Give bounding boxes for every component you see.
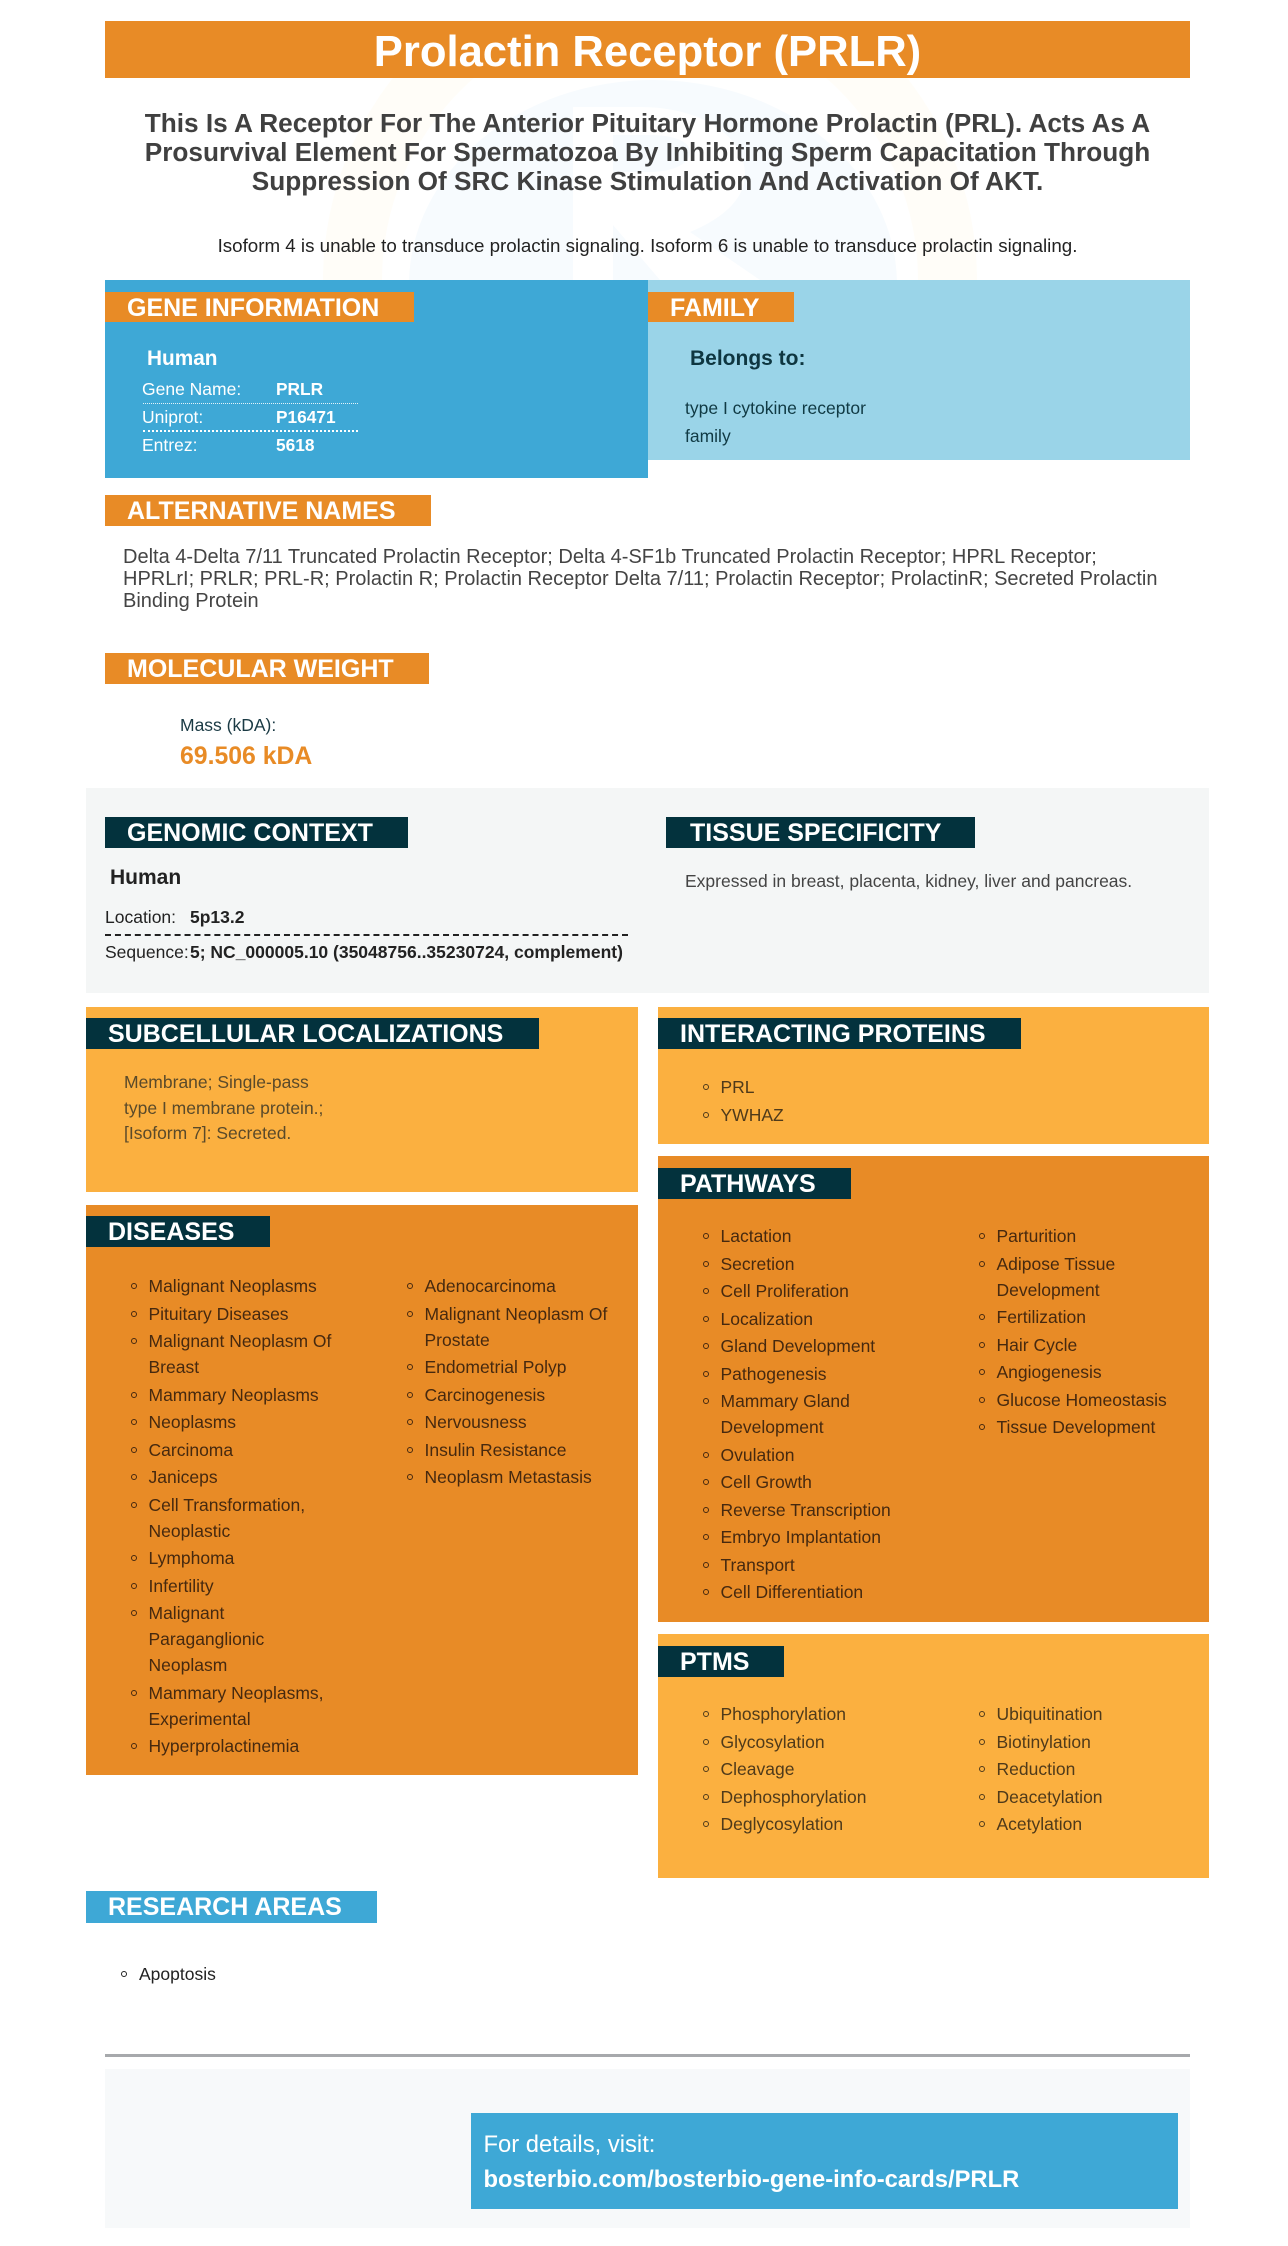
alternative names text: Binding Protein bbox=[123, 590, 259, 612]
belongs to label: Belongs to: bbox=[690, 347, 806, 370]
list: diseases column 2: Adenocarcinoma bbox=[424, 1276, 556, 1296]
list: pathways column 1: Secretion bbox=[720, 1254, 794, 1274]
gene name row bbox=[142, 379, 323, 399]
list: research areas: Apoptosis bbox=[139, 1964, 216, 1984]
heading: alternative names: ALTERNATIVE NAMES bbox=[127, 497, 396, 525]
list: pathways column 1: Lactation bbox=[720, 1226, 792, 1246]
list: pathways column 1: Embryo Implantation bbox=[720, 1527, 881, 1547]
list: pathways column 2: Hair Cycle bbox=[996, 1334, 1077, 1354]
list: diseases column 2: Insulin Resistance bbox=[424, 1440, 567, 1460]
list: pathways column 1: Cell Differentiation bbox=[720, 1582, 863, 1602]
location row bbox=[105, 907, 244, 927]
family text bbox=[685, 398, 866, 446]
heading: genomic context: GENOMIC CONTEXT bbox=[127, 819, 373, 847]
list: pathways column 1 bbox=[703, 1226, 891, 1602]
panel: gene information: PRLR bbox=[276, 379, 323, 399]
list: interacting proteins: YWHAZ bbox=[720, 1104, 784, 1124]
callout label: For details, visit: bbox=[484, 2131, 655, 2158]
list: diseases column 1: Paraganglionic bbox=[148, 1629, 264, 1649]
list: diseases column 1: Infertility bbox=[148, 1576, 214, 1596]
list: diseases column 2: Neoplasm Metastasis bbox=[424, 1467, 592, 1487]
panel: family bbox=[648, 280, 1190, 460]
list: ptms column 1: Dephosphorylation bbox=[720, 1786, 866, 1806]
species label: Human bbox=[110, 866, 181, 889]
list: interacting proteins bbox=[703, 1077, 784, 1124]
list: diseases column 2 bbox=[407, 1276, 608, 1487]
subtitle: This Is A Receptor For The Anterior Pituitary Hormone Prolactin (PRL). Acts As A bbox=[145, 108, 1150, 138]
isoform note: Isoform 4 is unable to transduce prolactin signaling. Isoform 6 is unable to transduce prolactin signaling. bbox=[218, 235, 1077, 256]
title: Prolactin Receptor (PRLR) bbox=[374, 28, 921, 76]
list: pathways column 1: Cell Growth bbox=[720, 1472, 812, 1492]
list: diseases column 1: Neoplastic bbox=[148, 1520, 230, 1540]
localization text bbox=[124, 1072, 323, 1143]
list: diseases column 1: Experimental bbox=[148, 1708, 251, 1728]
heading: pathways bbox=[658, 1168, 851, 1199]
list: pathways column 2: Development bbox=[996, 1280, 1100, 1300]
list: interacting proteins: PRL bbox=[720, 1077, 755, 1097]
list: diseases column 1: Mammary Neoplasms, bbox=[148, 1682, 324, 1702]
list: diseases column 1: Hyperprolactinemia bbox=[148, 1736, 299, 1756]
list: diseases column 2: Prostate bbox=[424, 1330, 490, 1350]
list: ptms column 2: Ubiquitination bbox=[996, 1704, 1103, 1724]
title bbox=[105, 21, 1190, 78]
list: pathways column 1: Transport bbox=[720, 1554, 795, 1574]
sequence row bbox=[105, 942, 623, 962]
list: pathways column 1: Pathogenesis bbox=[720, 1364, 827, 1384]
alternative names text bbox=[123, 546, 1158, 612]
list: diseases column 2: Nervousness bbox=[424, 1412, 527, 1432]
list: ptms column 1: Deglycosylation bbox=[720, 1814, 843, 1834]
list: ptms column 1: Glycosylation bbox=[720, 1732, 825, 1752]
list: ptms column 2 bbox=[979, 1704, 1103, 1834]
uniprot row: Uniprot: bbox=[142, 407, 203, 427]
list: diseases column 2: Endometrial Polyp bbox=[424, 1357, 567, 1377]
localization text: Membrane; Single-pass bbox=[124, 1072, 309, 1092]
list: pathways column 2: Glucose Homeostasis bbox=[996, 1390, 1167, 1410]
list: ptms column 2: Acetylation bbox=[996, 1814, 1082, 1834]
mass label: Mass (kDA): bbox=[180, 715, 276, 735]
localization text: type I membrane protein.; bbox=[124, 1098, 323, 1118]
list: diseases column 1: Malignant bbox=[148, 1603, 224, 1623]
callout: details link bbox=[471, 2113, 1178, 2209]
panel: interacting proteins bbox=[658, 1007, 1209, 1144]
list: pathways column 1: Localization bbox=[720, 1308, 813, 1328]
list: diseases column 1: Mammary Neoplasms bbox=[148, 1384, 319, 1404]
list: diseases column 1: Pituitary Diseases bbox=[148, 1304, 289, 1324]
heading: family bbox=[648, 292, 794, 322]
sequence row: Sequence: bbox=[105, 942, 189, 962]
list: diseases column 1: Neoplasms bbox=[148, 1412, 236, 1432]
list: pathways column 2: Tissue Development bbox=[996, 1417, 1155, 1437]
alternative names text: HPRLrI; PRLR; PRL-R; Prolactin R; Prolactin Receptor Delta 7/11; Prolactin Receptor; ProlactinR; Secreted Prolactin bbox=[123, 568, 1158, 590]
list: diseases column 1: Janiceps bbox=[148, 1467, 218, 1487]
list: diseases column 2: Carcinogenesis bbox=[424, 1384, 545, 1404]
heading: subcellular localizations: SUBCELLULAR LOCALIZATIONS bbox=[108, 1020, 503, 1048]
entrez row: Entrez: bbox=[142, 435, 197, 455]
panel: pathways bbox=[658, 1156, 1209, 1622]
list: diseases column 1: Malignant Neoplasm Of bbox=[148, 1331, 331, 1351]
mass value: 69.506 kDA bbox=[180, 743, 312, 770]
heading: ptms bbox=[658, 1646, 784, 1677]
list: pathways column 1: Mammary Gland bbox=[720, 1391, 850, 1411]
list: pathways column 2: Parturition bbox=[996, 1226, 1076, 1246]
list: pathways column 2: Adipose Tissue bbox=[996, 1254, 1115, 1274]
list: diseases column 2: Malignant Neoplasm Of bbox=[424, 1304, 607, 1324]
heading: pathways: PATHWAYS bbox=[680, 1170, 816, 1198]
tissue text: Expressed in breast, placenta, kidney, liver and pancreas. bbox=[685, 871, 1132, 891]
list: ptms column 2: Reduction bbox=[996, 1759, 1075, 1779]
panel: footer bbox=[105, 2069, 1190, 2228]
subtitle: Suppression Of SRC Kinase Stimulation And Activation Of AKT. bbox=[252, 166, 1043, 196]
list: pathways column 2: Fertilization bbox=[996, 1307, 1086, 1327]
heading: interacting proteins: INTERACTING PROTEINS bbox=[680, 1020, 986, 1048]
heading: research areas: RESEARCH AREAS bbox=[108, 1893, 342, 1921]
watermark logo bbox=[300, 78, 1000, 280]
list: diseases column 1: Carcinoma bbox=[148, 1440, 233, 1460]
heading: family: FAMILY bbox=[670, 294, 759, 322]
list: diseases column 1: Neoplasm bbox=[148, 1655, 227, 1675]
family text: family bbox=[685, 426, 731, 446]
localization text: [Isoform 7]: Secreted. bbox=[124, 1123, 291, 1143]
panel: gene information bbox=[105, 280, 648, 478]
list: diseases column 1 bbox=[131, 1276, 332, 1756]
list: pathways column 1: Gland Development bbox=[720, 1336, 875, 1356]
list: pathways column 1: Reverse Transcription bbox=[720, 1500, 891, 1520]
list: pathways column 1: Ovulation bbox=[720, 1444, 794, 1464]
panel: genomic context and tissue specificity: 5p13.2 bbox=[190, 907, 244, 927]
panel: subcellular localizations bbox=[86, 1007, 638, 1192]
panel: genomic context and tissue specificity: 5; NC_000005.10 (35048756..35230724, complement) bbox=[190, 942, 623, 962]
list: ptms column 1 bbox=[703, 1704, 866, 1834]
list: diseases column 1: Malignant Neoplasms bbox=[148, 1276, 317, 1296]
list: pathways column 1: Cell Proliferation bbox=[720, 1281, 849, 1301]
list: diseases column 1: Lymphoma bbox=[148, 1548, 234, 1568]
list: ptms column 1: Cleavage bbox=[720, 1759, 794, 1779]
list: ptms column 2: Deacetylation bbox=[996, 1786, 1103, 1806]
list: ptms column 2: Biotinylation bbox=[996, 1732, 1091, 1752]
gene name row: Gene Name: bbox=[142, 379, 241, 399]
heading: tissue specificity: TISSUE SPECIFICITY bbox=[690, 819, 941, 847]
list: ptms column 1: Phosphorylation bbox=[720, 1704, 846, 1724]
panel: gene information: 5618 bbox=[276, 435, 314, 455]
uniprot row bbox=[142, 407, 336, 427]
subtitle: Prosurvival Element For Spermatozoa By Inhibiting Sperm Capacitation Through bbox=[145, 137, 1150, 167]
location row: Location: bbox=[105, 907, 176, 927]
panel: gene information: P16471 bbox=[276, 407, 336, 427]
list: pathways column 2: Angiogenesis bbox=[996, 1362, 1102, 1382]
callout url: bosterbio.com/bosterbio-gene-info-cards/PRLR bbox=[484, 2166, 1019, 2192]
heading: diseases bbox=[86, 1216, 270, 1247]
family text: type I cytokine receptor bbox=[685, 398, 866, 418]
list: diseases column 1: Breast bbox=[148, 1357, 199, 1377]
heading: gene information: GENE INFORMATION bbox=[127, 294, 379, 322]
list: pathways column 2 bbox=[979, 1226, 1167, 1437]
heading: ptms: PTMS bbox=[680, 1648, 749, 1676]
list: diseases column 1: Cell Transformation, bbox=[148, 1494, 305, 1514]
subtitle bbox=[145, 108, 1150, 196]
entrez row bbox=[142, 435, 314, 455]
panel: ptms bbox=[658, 1634, 1209, 1878]
list: pathways column 1: Development bbox=[720, 1417, 824, 1437]
heading: molecular weight: MOLECULAR WEIGHT bbox=[127, 655, 394, 683]
panel: diseases bbox=[86, 1205, 638, 1775]
alternative names text: Delta 4-Delta 7/11 Truncated Prolactin Receptor; Delta 4-SF1b Truncated Prolactin Receptor; HPRL Receptor; bbox=[123, 546, 1097, 568]
species label: Human bbox=[147, 347, 217, 370]
heading: diseases: DISEASES bbox=[108, 1218, 234, 1246]
panel: genomic context and tissue specificity bbox=[86, 788, 1209, 993]
